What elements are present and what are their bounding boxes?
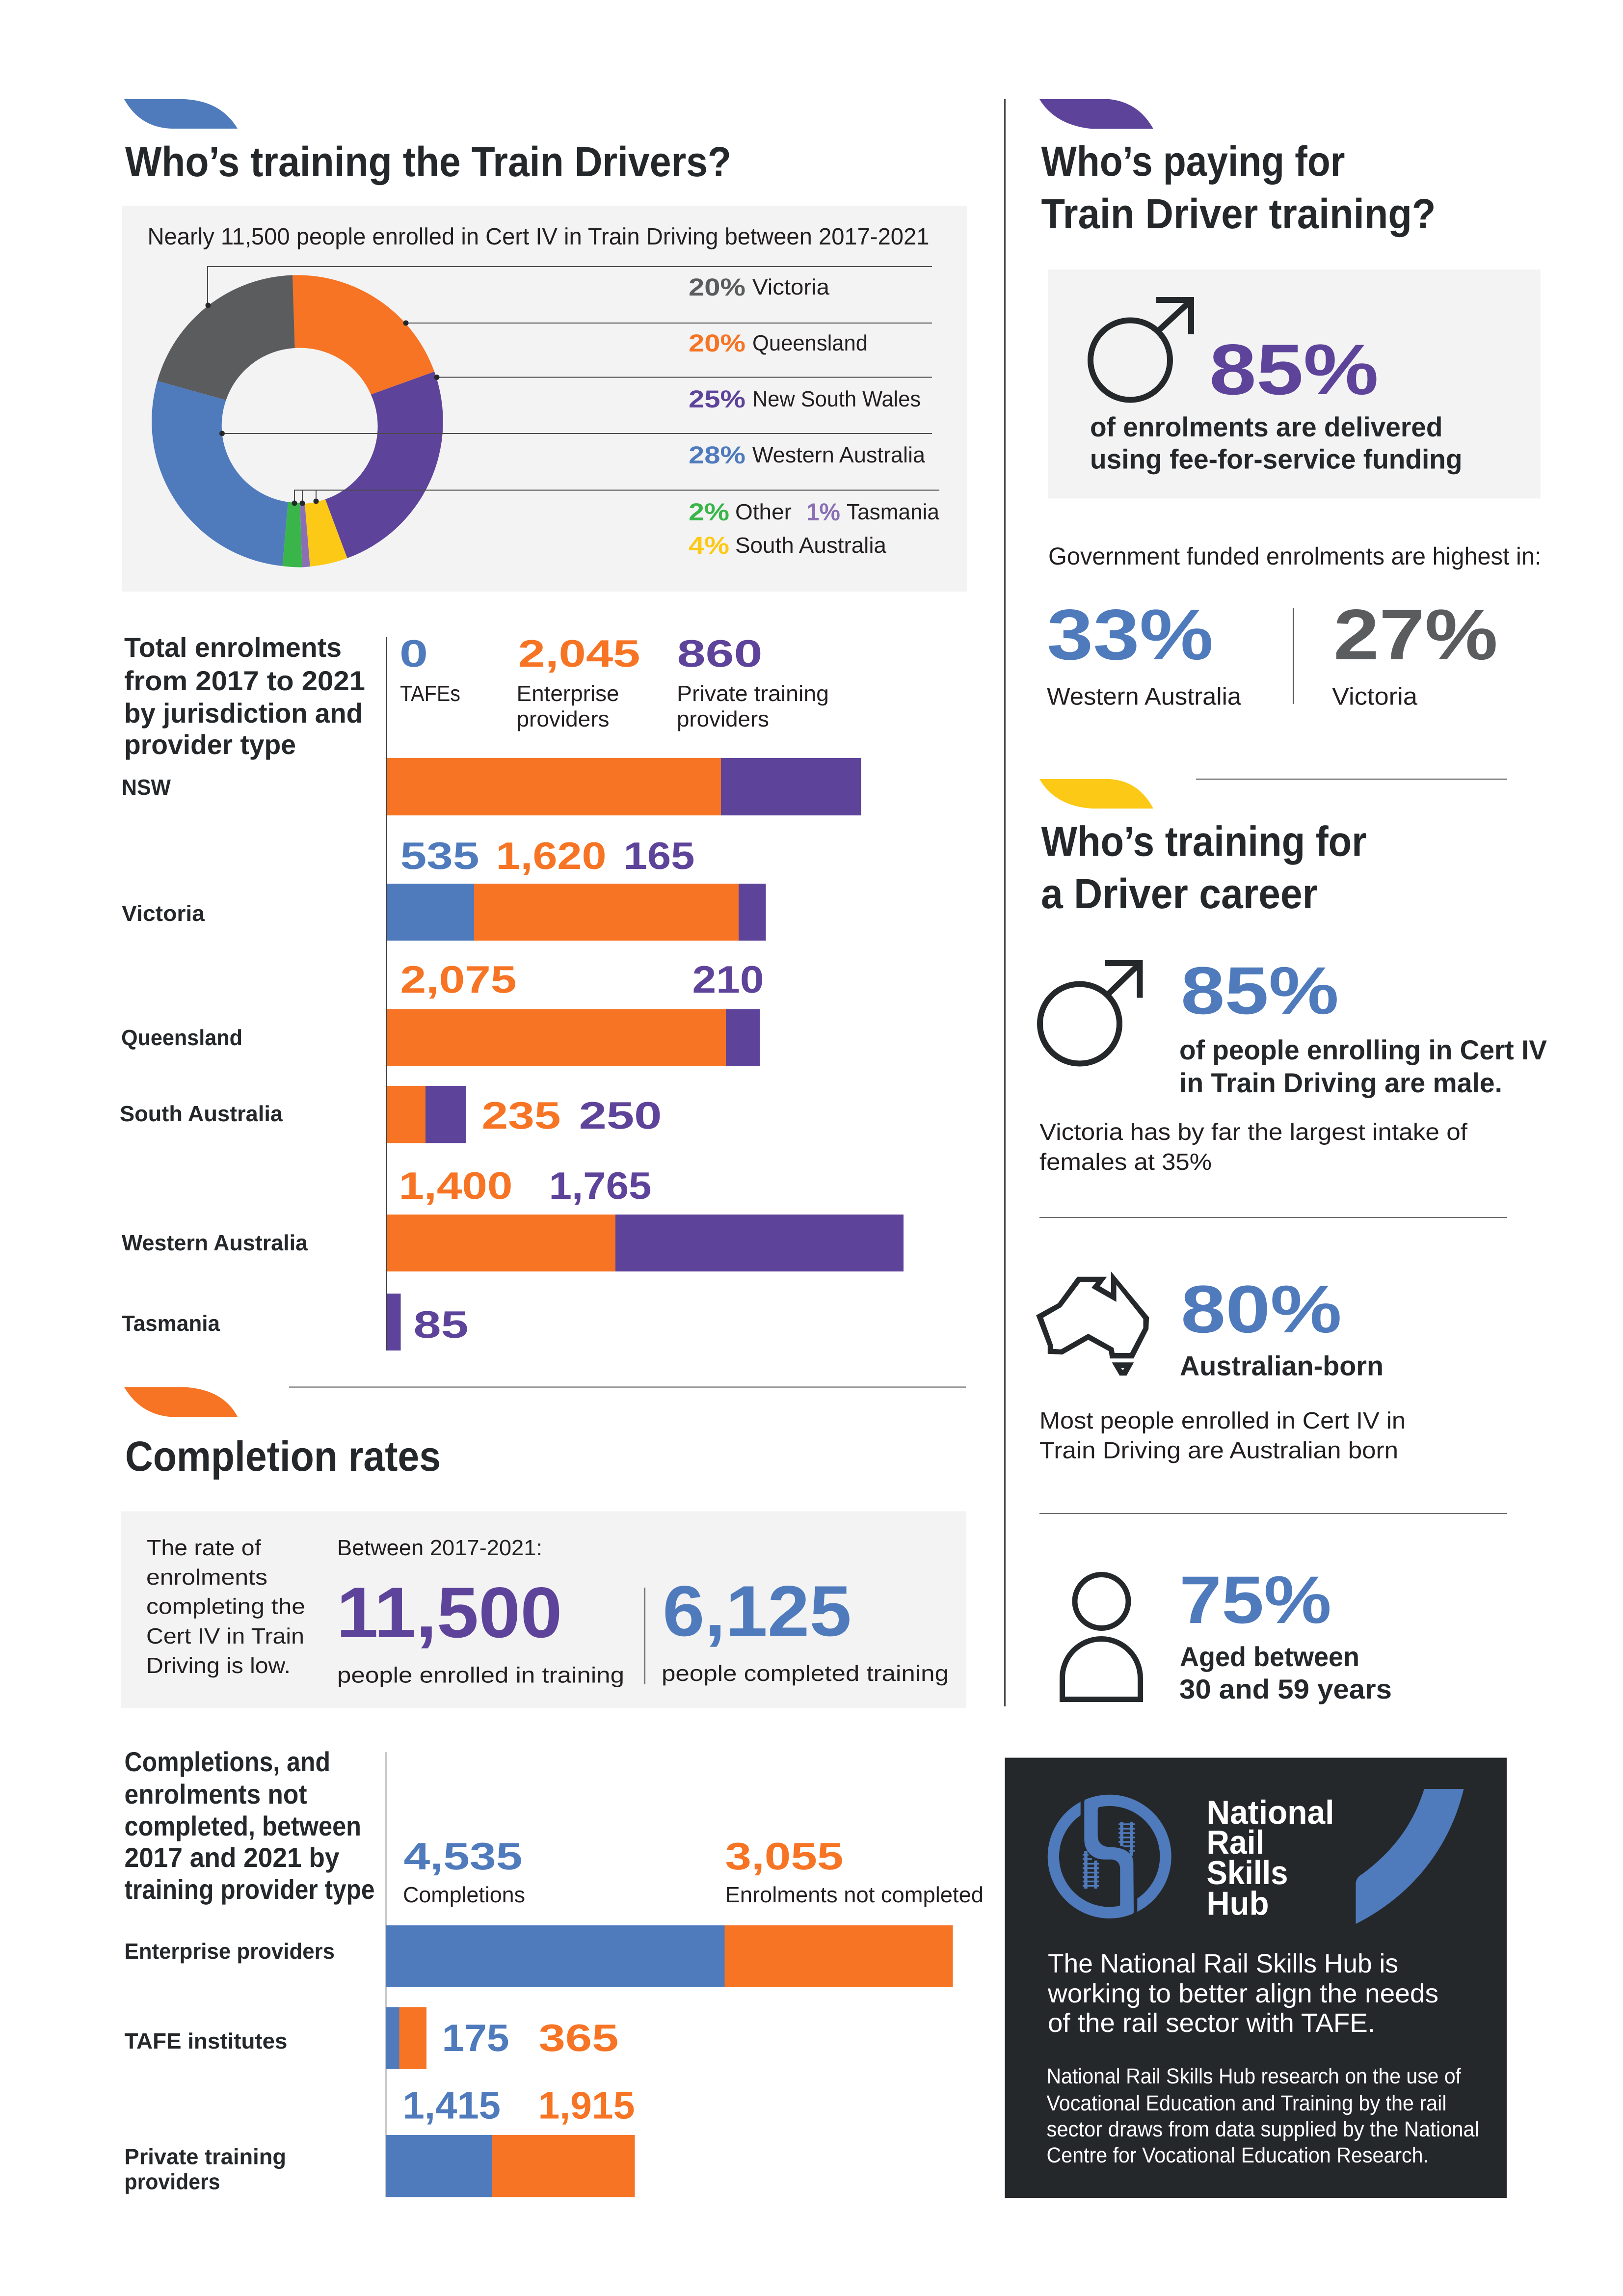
chart heading: Completions, and xyxy=(125,1746,330,1777)
section: who's training for a driver career xyxy=(1036,779,1547,1704)
bar row: private training providers xyxy=(125,2083,635,2197)
logo wordmark: Hub xyxy=(1206,1885,1269,1922)
bar row: Western Australia: Western Australia xyxy=(122,1230,308,1255)
stat: age: Aged between xyxy=(1180,1641,1359,1672)
heading: Train Driver training? xyxy=(1041,190,1436,238)
stat: male: females at 35% xyxy=(1039,1149,1212,1175)
stat: male: 85% xyxy=(1181,953,1339,1028)
side note: Driving is low. xyxy=(146,1653,291,1678)
stat: age: 30 and 59 years xyxy=(1179,1674,1392,1704)
chart heading: provider type xyxy=(124,729,296,760)
chart heading: from 2017 to 2021 xyxy=(124,665,365,696)
totals key: Enterprise xyxy=(516,681,619,706)
chart heading: Total enrolments xyxy=(124,632,342,663)
bar row: Victoria xyxy=(122,834,766,941)
donut chart xyxy=(152,275,443,567)
stat: enrolled xyxy=(337,1572,624,1688)
stat: Western Australia: 33% xyxy=(1047,594,1213,675)
panel: completion stats: Between 2017-2021: xyxy=(337,1535,542,1560)
chart heading: training provider type xyxy=(125,1874,375,1905)
stat: Australian-born: 80% xyxy=(1181,1272,1342,1347)
heading xyxy=(1041,138,1436,238)
bar row: NSW xyxy=(122,758,861,815)
bar row: NSW: NSW xyxy=(122,775,171,800)
chart heading xyxy=(124,632,365,760)
legend: New South Wales xyxy=(752,386,921,411)
side note xyxy=(146,1535,305,1678)
bar row: Tasmania: Tasmania xyxy=(122,1311,220,1336)
legend: 20% xyxy=(689,273,745,301)
chart heading xyxy=(125,1746,375,1905)
stat: Victoria: Victoria xyxy=(1332,682,1417,710)
logo wordmark xyxy=(1206,1794,1334,1922)
bar row: South Australia: 235 xyxy=(482,1094,560,1137)
legend: 1% xyxy=(806,498,840,526)
key: Completions xyxy=(403,1882,525,1907)
bar row: TAFE institutes xyxy=(125,2007,618,2069)
legend: Other xyxy=(735,499,792,524)
logo mark xyxy=(1048,1795,1171,1918)
accent leaf: orange xyxy=(124,1387,238,1417)
logo wordmark: National xyxy=(1206,1794,1334,1831)
chart heading: enrolments not xyxy=(125,1779,307,1810)
bar row: private training providers: 1,915 xyxy=(538,2083,635,2127)
stat: male: Victoria has by far the largest intake of xyxy=(1039,1119,1468,1145)
source note xyxy=(1046,2064,1479,2167)
section: who's training the train drivers xyxy=(122,99,967,592)
totals key: 860 xyxy=(677,632,763,675)
accent leaf: purple xyxy=(1039,99,1153,129)
bar row: enterprise providers xyxy=(125,1925,953,1987)
stat: male xyxy=(1039,953,1547,1175)
chart: completions by provider type xyxy=(125,1746,984,2197)
stat: male: in Train Driving are male. xyxy=(1179,1067,1502,1098)
side note: The rate of xyxy=(147,1535,262,1560)
heading: Who’s training the Train Drivers? xyxy=(125,138,731,186)
key xyxy=(403,1835,984,1907)
panel: fee-for-service xyxy=(1048,270,1541,499)
key: Enrolments not completed xyxy=(725,1882,984,1907)
panel: completion stats xyxy=(121,1511,966,1708)
bar row: Queensland: Queensland xyxy=(121,1025,242,1050)
legend: 28% xyxy=(689,441,745,469)
key: 4,535 xyxy=(403,1835,522,1878)
side note: enrolments xyxy=(146,1565,267,1590)
stat: age: 75% xyxy=(1179,1563,1331,1638)
bar row: Queensland: 210 xyxy=(692,958,764,1001)
totals key: providers xyxy=(516,706,610,731)
stat: completed: people completed training xyxy=(662,1661,949,1686)
stat: enrolled: people enrolled in training xyxy=(337,1662,624,1688)
caption: using fee-for-service funding xyxy=(1090,444,1463,474)
chart heading: 2017 and 2021 by xyxy=(125,1842,340,1873)
bar row: enterprise providers: Enterprise providers xyxy=(125,1939,335,1964)
key: 3,055 xyxy=(725,1835,843,1878)
government funded text: Government funded enrolments are highest in: xyxy=(1048,542,1541,570)
bar row: Victoria: 535 xyxy=(400,834,479,877)
stat: enrolled: 11,500 xyxy=(337,1572,562,1652)
chart heading: by jurisdiction and xyxy=(124,698,363,729)
heading: Completion rates xyxy=(125,1433,441,1480)
stat: Australian-born: Train Driving are Australian born xyxy=(1039,1437,1398,1464)
heading: a Driver career xyxy=(1041,870,1318,918)
logo wordmark: Rail xyxy=(1206,1824,1264,1861)
source note: Vocational Education and Training by the rail xyxy=(1046,2091,1447,2115)
legend: 20% xyxy=(689,329,745,357)
section: who's paying xyxy=(1039,99,1541,710)
bar row: TAFE institutes: TAFE institutes xyxy=(125,2028,288,2053)
bar row: South Australia xyxy=(120,1086,662,1143)
panel intro text: Nearly 11,500 people enrolled in Cert IV in Train Driving between 2017-2021 xyxy=(147,224,930,250)
legend: 25% xyxy=(689,385,745,413)
bar row: private training providers: Private training xyxy=(125,2144,286,2169)
bar row: South Australia: 250 xyxy=(579,1094,662,1137)
bar row: private training providers: providers xyxy=(125,2169,220,2194)
bar row: Victoria: Victoria xyxy=(122,901,205,926)
statement: The National Rail Skills Hub is xyxy=(1048,1949,1398,1978)
heading xyxy=(1041,818,1366,918)
bar row: Queensland xyxy=(121,958,764,1066)
stat: Victoria: 27% xyxy=(1333,594,1498,675)
panel: fee-for-service: 85% xyxy=(1209,329,1379,409)
bar row: Western Australia: 1,400 xyxy=(399,1164,512,1207)
statement: of the rail sector with TAFE. xyxy=(1048,2008,1375,2038)
chart heading: completed, between xyxy=(125,1810,361,1841)
bar row: private training providers: 1,415 xyxy=(402,2083,501,2127)
legend: Western Australia xyxy=(752,442,926,467)
side note: completing the xyxy=(146,1594,305,1619)
bar row: Queensland: 2,075 xyxy=(400,958,516,1001)
accent leaf: yellow xyxy=(1039,779,1153,809)
legend xyxy=(689,273,940,559)
stat: age xyxy=(1062,1563,1392,1704)
stat: Western Australia xyxy=(1047,594,1241,710)
bar row: Western Australia xyxy=(122,1164,904,1271)
section: completion rates xyxy=(121,1387,966,1708)
leader lines xyxy=(205,267,939,506)
stat: completed xyxy=(662,1571,949,1686)
icon: male symbol xyxy=(1091,300,1191,400)
icon: Australia outline xyxy=(1036,1271,1149,1376)
stat: male: of people enrolling in Cert IV xyxy=(1179,1034,1547,1065)
statement: working to better align the needs xyxy=(1047,1979,1438,2008)
stat: Victoria xyxy=(1332,594,1498,710)
legend: Queensland xyxy=(752,330,868,355)
bar row: Tasmania xyxy=(122,1294,468,1351)
totals key: TAFEs xyxy=(400,681,460,706)
source note: Centre for Vocational Education Research. xyxy=(1046,2143,1429,2167)
totals key: Private training xyxy=(677,681,829,706)
totals key: 0 xyxy=(399,632,428,675)
source note: sector draws from data supplied by the National xyxy=(1046,2117,1479,2141)
legend: 4% xyxy=(689,532,729,559)
swoosh xyxy=(1356,1789,1463,1924)
accent leaf: blue xyxy=(124,99,238,129)
stat: Australian-born xyxy=(1036,1271,1406,1464)
totals key: 2,045 xyxy=(518,632,640,675)
legend: Victoria xyxy=(752,274,830,299)
icon: male symbol xyxy=(1040,963,1140,1063)
stat: Australian-born: Australian-born xyxy=(1180,1350,1384,1381)
legend: Tasmania xyxy=(847,499,940,524)
bar row: Western Australia: 1,765 xyxy=(549,1164,652,1207)
heading: Who’s training for xyxy=(1041,818,1366,865)
side note: Cert IV in Train xyxy=(146,1623,304,1648)
bar row: Tasmania: 85 xyxy=(413,1303,468,1346)
bar row: Victoria: 165 xyxy=(623,834,695,877)
bar row: TAFE institutes: 175 xyxy=(442,2016,509,2059)
legend: South Australia xyxy=(735,533,887,558)
source note: National Rail Skills Hub research on the use of xyxy=(1046,2064,1462,2088)
panel: donut chart xyxy=(122,206,967,592)
statement xyxy=(1047,1949,1438,2038)
caption: of enrolments are delivered xyxy=(1090,411,1443,442)
stat: Western Australia: Western Australia xyxy=(1047,682,1241,710)
bar row: South Australia: South Australia xyxy=(120,1101,283,1126)
bar row: Victoria: 1,620 xyxy=(496,834,607,877)
icon: person xyxy=(1062,1575,1141,1700)
logo wordmark: Skills xyxy=(1206,1854,1288,1891)
legend: 2% xyxy=(689,498,729,526)
bar row: TAFE institutes: 365 xyxy=(539,2016,618,2059)
stat: Australian-born: Most people enrolled in Cert IV in xyxy=(1039,1408,1406,1434)
totals key xyxy=(399,632,829,731)
heading: Who’s paying for xyxy=(1041,138,1345,185)
column divider xyxy=(1004,99,1006,1706)
caption xyxy=(1090,411,1463,474)
panel: National Rail Skills Hub xyxy=(1005,1757,1507,2198)
totals key: providers xyxy=(677,706,769,731)
chart: total enrolments by jurisdiction xyxy=(120,632,904,1351)
stat: completed: 6,125 xyxy=(663,1571,851,1651)
